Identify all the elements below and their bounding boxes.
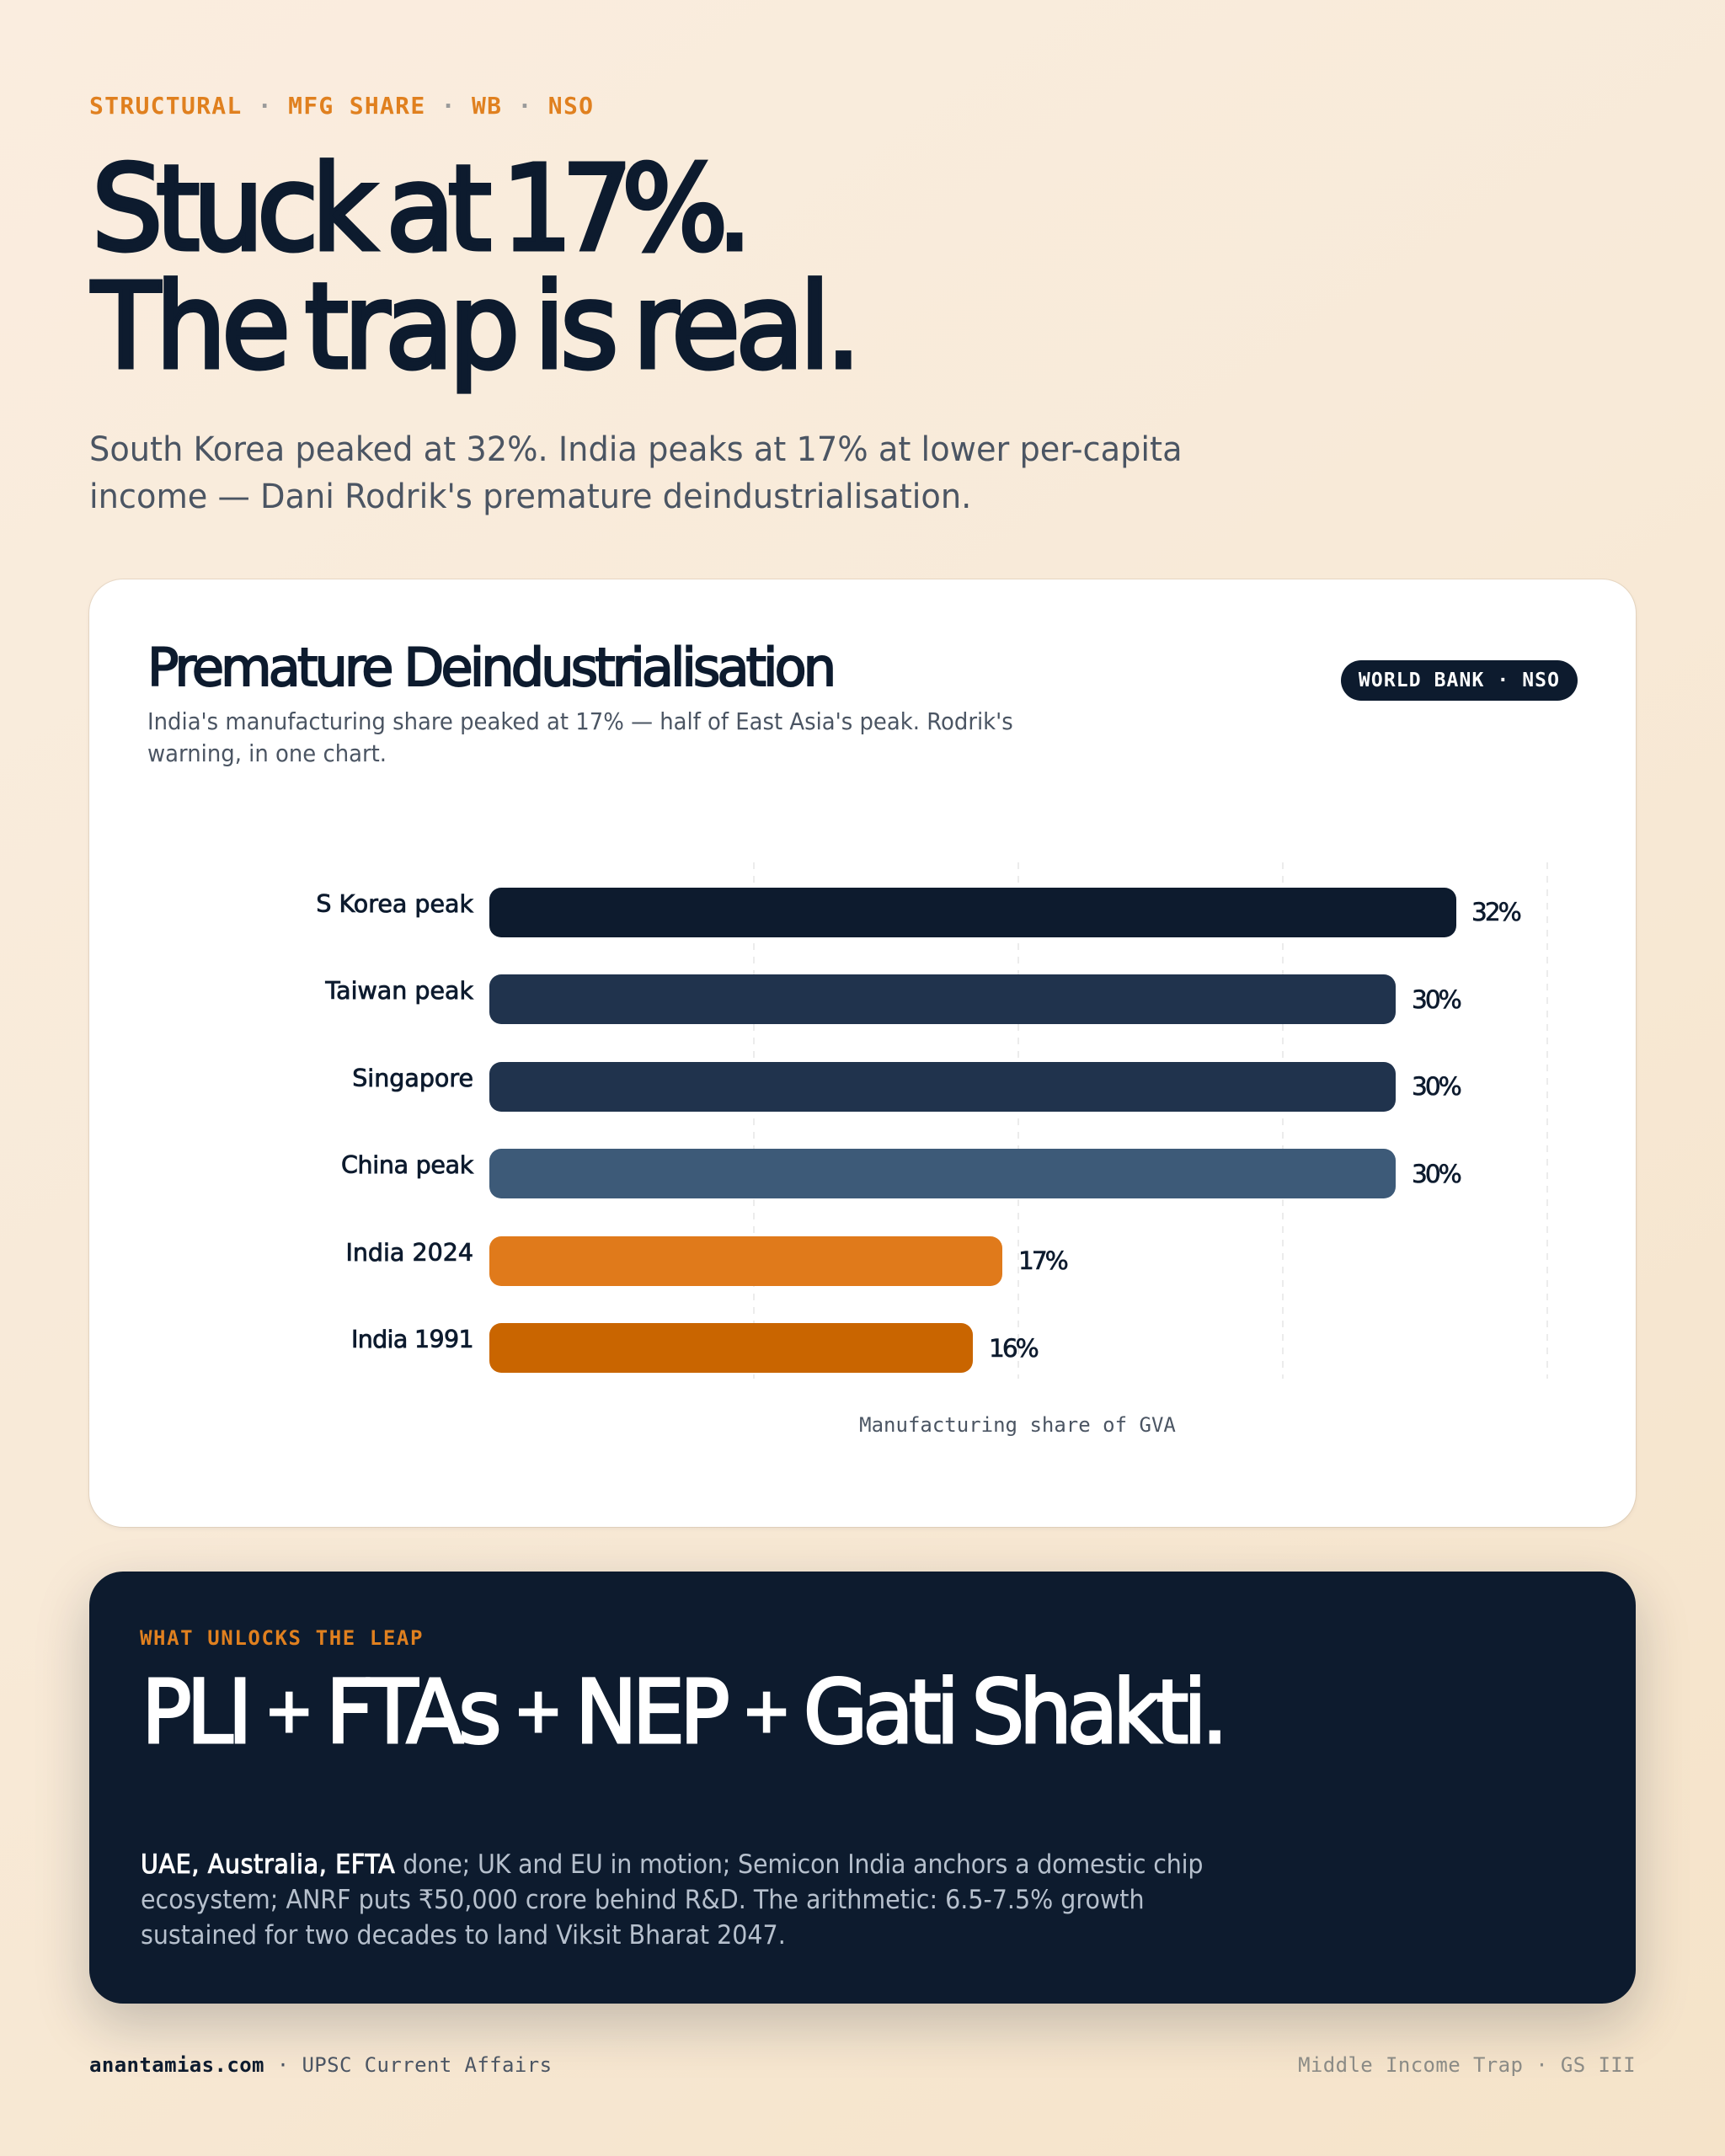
panel body text: sustained for two decades to land Viksit Bharat 2047. bbox=[141, 1920, 786, 1951]
subtitle: South Korea peaked at 32%. India peaks at 17% at lower per-capita bbox=[89, 430, 1183, 469]
panel body text bbox=[141, 1849, 1203, 1951]
panel: chart card bbox=[89, 579, 1636, 1527]
eyebrow: STRUCTURAL · MFG SHARE · WB · NSO bbox=[89, 92, 594, 120]
axis label: Manufacturing share of GVA bbox=[859, 1413, 1176, 1437]
bar chart: 30% bbox=[1412, 1072, 1460, 1101]
subtitle: income — Dani Rodrik's premature deindustrialisation. bbox=[89, 478, 971, 516]
bar chart: 30% bbox=[1412, 1160, 1460, 1188]
row: Singapore: Singapore bbox=[352, 1065, 473, 1092]
card description: India's manufacturing share peaked at 17% — half of East Asia's peak. Rodrik's bbox=[147, 707, 1013, 735]
bar chart bbox=[316, 862, 1548, 1379]
bar chart: 32% bbox=[1471, 898, 1519, 926]
row: S Korea peak: S Korea peak bbox=[316, 890, 473, 918]
row: Taiwan peak: Taiwan peak bbox=[325, 977, 473, 1005]
subtitle bbox=[89, 430, 1183, 516]
bar chart: 16% bbox=[989, 1334, 1037, 1363]
panel headline: PLI + FTAs + NEP + Gati Shakti. bbox=[142, 1661, 1223, 1764]
footer left: anantamias.com · UPSC Current Affairs bbox=[89, 2053, 552, 2077]
row: India 2024: India 2024 bbox=[345, 1239, 473, 1267]
title: The trap is real. bbox=[92, 259, 857, 396]
bar chart: 30% bbox=[1412, 985, 1460, 1014]
title: Stuck at 17%. bbox=[92, 141, 745, 278]
bar chart: 17% bbox=[1018, 1246, 1066, 1275]
footer right: Middle Income Trap · GS III bbox=[1298, 2053, 1636, 2077]
row: India 1991: India 1991 bbox=[351, 1326, 473, 1353]
title bbox=[89, 141, 857, 396]
card description: warning, in one chart. bbox=[147, 739, 387, 767]
source badge bbox=[1341, 660, 1578, 701]
panel: what unlocks the leap bbox=[89, 1572, 1636, 2004]
panel body text: UAE, Australia, EFTA done; UK and EU in motion; Semicon India anchors a domestic chip bbox=[141, 1849, 1203, 1880]
panel body text: ecosystem; ANRF puts ₹50,000 crore behind R&D. The arithmetic: 6.5-7.5% growth bbox=[141, 1885, 1145, 1915]
panel eyebrow: WHAT UNLOCKS THE LEAP bbox=[140, 1626, 424, 1650]
card description bbox=[147, 707, 1013, 767]
source badge: WORLD BANK · NSO bbox=[1359, 670, 1560, 691]
card heading: Premature Deindustrialisation bbox=[147, 637, 833, 698]
row: China peak: China peak bbox=[341, 1151, 473, 1179]
